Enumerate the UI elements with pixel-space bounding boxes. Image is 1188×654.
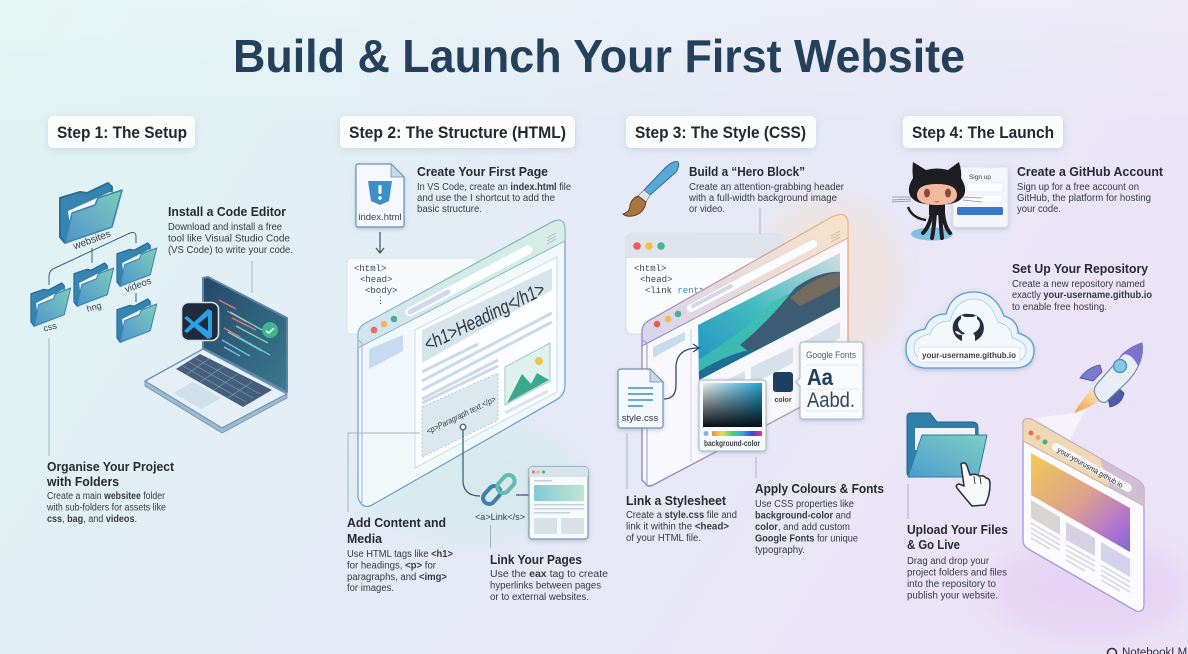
text: link a stylesheet: of your HTML file. [626,533,701,544]
browser illustration: live website: your-yourusma.github.io [1056,445,1125,490]
text: install a code editor: Download and install a free [168,222,282,233]
text: organise your project [46,459,175,525]
icon: chain link [481,473,517,506]
icon: octocat [892,162,982,240]
icon: folder tree: css [42,320,58,334]
text: add content and media: for headings, <p> for [347,560,437,572]
text: create a github account [1017,164,1164,215]
text: add content and media: paragraphs, and <img> [347,572,447,583]
text: build a hero block: Create an attention-grabbing header [689,182,845,193]
text: install a code editor: (VS Code) to write your code. [168,245,293,256]
text: set up your repository: exactly your-username.github.io [1012,290,1152,301]
heading: step 2: Step 2: The Structure (HTML) [349,123,566,142]
icon: folder tree [31,183,157,342]
text: apply colours and fonts [755,481,884,556]
text: create your first page: basic structure. [417,204,482,215]
icon: index.html file: index.html [358,212,402,223]
icon: rocket [1074,343,1142,413]
text: upload your files: & Go Live [907,537,960,552]
browser illustration: styled page [642,215,848,486]
code panel: <body> [365,286,397,296]
text: create a github account: your code. [1017,204,1061,215]
text: organise your project: with Folders [46,474,119,489]
light beam [1034,397,1092,440]
panel: step 2 the structure [340,116,608,603]
text: organise your project: with sub-folders for assets like [46,502,166,514]
title: Build & Launch Your First Website [233,30,965,82]
label: a link: <a>Link</s> [475,512,525,522]
text: link a stylesheet: Link a Stylesheet [626,493,727,508]
text: apply colours and fonts: typography. [755,545,805,556]
icon: style.css file: style.css [622,413,658,424]
heading: step 4 [903,116,1063,148]
icon: folder tree: videos [123,276,153,295]
code window: <html> [634,264,666,274]
heading: step 4: Step 4: The Launch [912,123,1054,142]
text: upload your files: into the repository to [907,579,996,590]
google fonts card [796,342,863,419]
text: apply colours and fonts: color, and add custom [755,522,850,533]
text: install a code editor [168,204,293,256]
text: organise your project: Create a main websitee folder [47,491,166,502]
text: link your pages: Use the eax tag to create [490,569,608,580]
icon: cloud with github: your-username.github.io [922,350,1016,360]
icon: big folder with cursor [907,413,990,506]
text: build a hero block: with a full-width background image [688,193,837,204]
text: set up your repository [1012,261,1152,313]
text: add content and media: for images. [347,583,394,594]
connector: stylesheet to hero [664,344,699,399]
text: create a github account: Sign up for a free account on [1017,182,1139,193]
icon: index.html file [356,164,404,227]
arrow: file to code [376,232,384,253]
mini linked page [529,467,588,539]
icon: folder tree: websites [71,229,112,253]
heading: step 1 [48,116,195,148]
panel: step 1 the setup [31,116,293,525]
code window: <link rent> [645,286,704,296]
text: create your first page: In VS Code, create an index.html file [417,182,571,193]
code panel [347,258,477,334]
text: apply colours and fonts: Apply Colours & Fonts [755,481,884,496]
browser illustration: html page: <p>Paragraph text.</p> [425,394,497,436]
color picker [699,380,766,451]
text: add content and media: Add Content and [347,515,446,530]
arrow: link to page [516,491,538,499]
icon: folder tree: hng [85,300,103,314]
text: upload your files: project folders and files [907,568,1007,578]
browser illustration: html page: <h1>Heading</h1> [420,278,549,356]
text: add content and media [347,515,453,594]
color swatch [773,372,793,404]
icon: sign up card [953,167,1008,227]
text: set up your repository: Set Up Your Repository [1012,261,1149,276]
code window: <head> [640,275,672,285]
icon: paintbrush [623,162,679,216]
text: set up your repository: Create a new repository named [1012,279,1145,290]
icon: laptop with VS Code [145,277,287,433]
text: add content and media: Use HTML tags like <h1> [347,549,453,560]
text: upload your files: publish your website. [907,590,998,602]
browser illustration: html page [358,220,565,506]
text: create a github account: Create a GitHub Account [1017,164,1164,179]
code panel: <head> [360,275,392,285]
text: create your first page: and use the I shortcut to add the [417,193,555,204]
icon: sign up card: Sign up [969,174,991,181]
heading: step 3 [626,116,816,148]
browser illustration: live website [1023,419,1144,611]
google fonts card: Aabd. [807,389,855,412]
text: upload your files: Upload Your Files [907,522,1008,537]
text: link your pages: Link Your Pages [490,552,582,567]
text: install a code editor: tool like Visual Studio Code [168,234,290,244]
text: apply colours and fonts: Use CSS properties like [755,499,854,510]
text: apply colours and fonts: background-color and [755,510,851,522]
text: create your first page [417,164,571,215]
heading: step 1: Step 1: The Setup [57,123,187,142]
text: link a stylesheet: Create a style.css file and [626,510,737,521]
text: organise your project: Organise Your Project [47,459,175,474]
code panel: ⋮ [376,296,385,306]
text: build a hero block: Build a “Hero Block” [689,164,805,179]
text: organise your project: css, bag, and videos. [47,514,137,525]
google fonts card: Aa [807,364,833,390]
color swatch: color [774,397,792,404]
text: build a hero block: or video. [689,204,725,215]
text: link a stylesheet: link it within the <head> [626,522,729,532]
text: link your pages: hyperlinks between pages [490,580,601,592]
text: set up your repository: to enable free hosting. [1012,302,1107,313]
color picker: background-color [704,439,760,448]
panel: step 3 the style [618,116,884,556]
code window [626,234,783,334]
icon: style.css file [618,369,663,428]
heading: step 2 [340,116,575,148]
heading: step 3: Step 3: The Style (CSS) [635,123,806,142]
text: apply colours and fonts: Google Fonts for unique [755,534,858,544]
text: create a github account: GitHub, the platform for hosting [1017,193,1151,204]
text: upload your files: Drag and drop your [907,556,990,567]
panel: step 4 the launch [892,116,1164,611]
icon: cloud with github [906,292,1034,368]
code panel: <html> [354,264,386,274]
text: link a stylesheet [626,493,737,544]
text: create your first page: Create Your First Page [417,164,548,179]
text: install a code editor: Install a Code Editor [168,204,286,219]
text: upload your files [907,522,1008,602]
text: link your pages [490,552,608,603]
text: add content and media: Media [347,531,383,546]
google fonts card: Google Fonts [806,350,856,361]
text: link your pages: or to external websites. [490,592,589,603]
text: build a hero block [688,164,845,215]
